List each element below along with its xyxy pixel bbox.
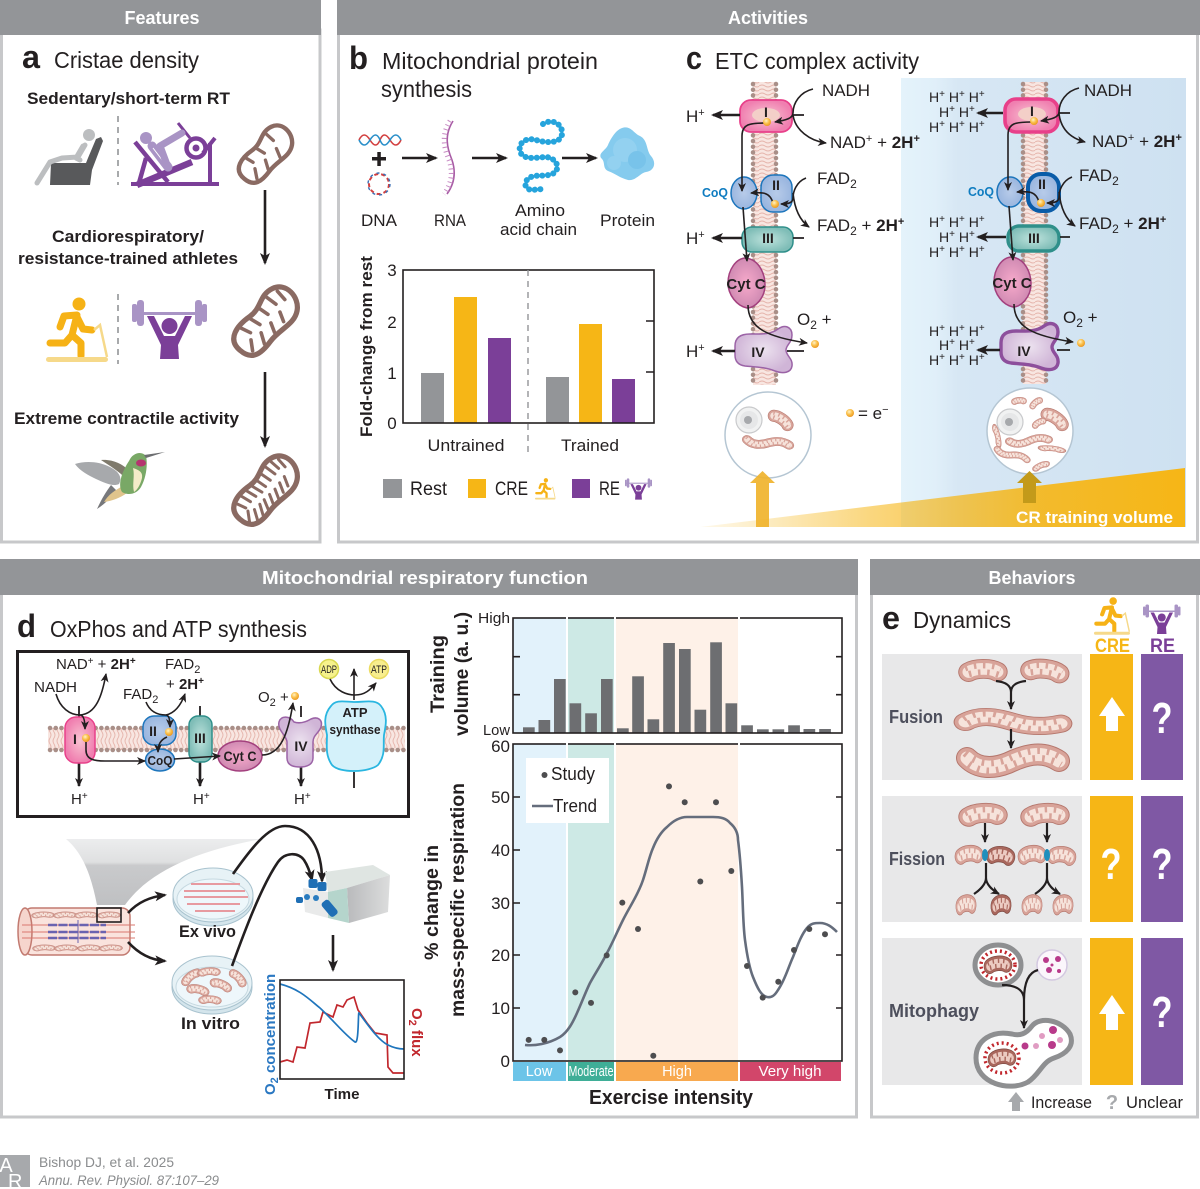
proton pump arrows <box>713 113 1070 351</box>
diagram: oxidative phosphorylation: + <box>88 656 94 667</box>
panel label a: a <box>22 39 40 75</box>
icon: RNA strand <box>444 121 454 194</box>
trained ETC labels: + <box>979 244 985 255</box>
untrained ETC labels: + <box>913 133 920 145</box>
diagram: oxidative phosphorylation: FAD <box>123 686 152 703</box>
panel label c: c <box>686 40 702 76</box>
trained ETC labels: 2H <box>1138 214 1160 233</box>
axis label: percent change in mass-specific respiration: % change in <box>422 845 443 960</box>
key: Increase and Unclear: Increase <box>1031 1093 1092 1112</box>
heading: OxPhos and ATP synthesis: OxPhos and ATP synthesis <box>50 616 307 642</box>
heading: Mitochondrial protein synthesis: synthesis <box>381 76 472 102</box>
chart: percent change in mass-specific respiration: 10 <box>491 999 510 1018</box>
label: Cardiorespiratory/resistance-trained athletes: Cardiorespiratory/ <box>52 227 204 246</box>
trained ETC complexes with thick outlines: Cyt C <box>992 275 1032 292</box>
untrained ETC labels: H <box>686 229 698 248</box>
diagram: oxidative phosphorylation <box>18 652 408 816</box>
diagram: oxidative phosphorylation: 2 <box>152 694 158 706</box>
label: Sedentary/short-term RT: Sedentary/short-term RT <box>27 89 231 108</box>
muscle cell: many mitochondria <box>987 388 1073 474</box>
trained ETC labels: H <box>939 229 949 245</box>
key: Increase and Unclear: ? <box>1106 1092 1118 1114</box>
icon: DNA helix and plasmid <box>359 135 401 195</box>
heading bar: Behaviors: Behaviors <box>988 568 1076 588</box>
heading: Cristae density: Cristae density <box>54 47 199 73</box>
trained ETC labels: H <box>955 229 969 245</box>
chart: oxygen trace: 2 <box>269 1077 281 1083</box>
trained ETC labels <box>929 81 1182 368</box>
diagram: oxidative phosphorylation: FAD <box>165 656 194 673</box>
untrained ETC labels: 2 <box>850 177 857 191</box>
trained ETC labels: + <box>939 214 945 225</box>
chart: oxygen trace: 2 <box>406 1020 418 1026</box>
diagram: oxidative phosphorylation: + <box>130 656 136 667</box>
untrained ETC complexes: II <box>772 177 780 193</box>
column head: CRE: CRE <box>1095 636 1130 657</box>
arrow <box>264 372 266 446</box>
label: Ex vivo: Ex vivo <box>179 922 236 941</box>
heading bar: Activities: Activities <box>728 8 808 28</box>
trained ETC labels: H <box>945 214 959 230</box>
diagram: oxidative phosphorylation: H <box>71 791 82 808</box>
dish: in vitro <box>172 956 252 1014</box>
trained ETC labels: + <box>1134 132 1154 151</box>
trained ETC labels: + <box>939 119 945 130</box>
trained ETC labels: + <box>979 89 985 100</box>
protein synthesis labels <box>361 201 655 239</box>
bar chart: fold-change from rest: 0 <box>387 414 397 433</box>
icon: respirometer <box>296 865 390 923</box>
RE column: mitophagy: ? <box>1152 988 1172 1037</box>
trained ETC labels: 2 <box>1112 222 1119 236</box>
chart: training volume bars: High <box>478 610 510 627</box>
trained ETC labels: 2H <box>1154 132 1175 151</box>
study points <box>526 783 828 1059</box>
bar chart: fold-change from rest: Untrained <box>428 436 504 455</box>
protein synthesis labels: Amino <box>515 201 565 220</box>
diagram: oxidative phosphorylation: 2H <box>111 656 130 673</box>
key: Increase and Unclear <box>1008 1092 1183 1114</box>
key: Increase and Unclear: Unclear <box>1126 1093 1183 1112</box>
trained ETC complexes with thick outlines: IV <box>1017 343 1031 359</box>
trained ETC labels: + <box>1083 308 1098 327</box>
heading: ETC complex activity: ETC complex activity <box>715 48 919 74</box>
diagram: oxidative phosphorylation: + <box>198 676 204 687</box>
untrained ETC complexes: III <box>762 230 774 246</box>
panel: Mitochondrial respiratory function <box>0 559 858 1117</box>
trained ETC labels: + <box>949 337 955 348</box>
diagram: oxidative phosphorylation: O <box>258 689 270 706</box>
citation: Bishop DJ, et al. 2025 <box>39 1154 174 1170</box>
trained ETC labels: FAD <box>1079 166 1112 185</box>
untrained ETC labels: O <box>797 310 810 329</box>
diagram: oxidative phosphorylation: H <box>193 791 204 808</box>
RE column: mitophagy <box>1141 938 1183 1085</box>
heading bar: Activities <box>337 0 1200 35</box>
trained ETC labels: H <box>939 104 949 120</box>
row: fission <box>882 796 1082 922</box>
diagram: oxidative phosphorylation: + <box>204 791 210 802</box>
chart: percent change in mass-specific respiration: 0 <box>501 1052 510 1071</box>
untrained ETC labels: + <box>872 133 892 152</box>
trained ETC labels: + <box>959 214 965 225</box>
diagram: oxidative phosphorylation: H <box>294 791 305 808</box>
trained ETC labels: + <box>959 323 965 334</box>
trained ETC labels: + <box>959 119 965 130</box>
arrow to ex vivo <box>128 895 165 913</box>
trained ETC labels: H <box>965 352 979 368</box>
chart: oxygen trace: O <box>262 1083 279 1095</box>
trained ETC labels: H <box>965 214 979 230</box>
arrow to in vitro <box>128 942 165 961</box>
dish: ex vivo <box>173 868 253 926</box>
trained ETC labels: + <box>969 229 975 240</box>
arrow: in vitro to respirometer <box>232 854 312 966</box>
intensity bands: High <box>662 1064 692 1080</box>
chart: training volume bars: volume (a. u.) <box>452 612 473 736</box>
trained ETC labels: H <box>929 214 939 230</box>
icon: muscle fibre <box>18 908 135 955</box>
trained ETC labels: + <box>979 352 985 363</box>
row: fusion: Fusion <box>889 707 943 727</box>
untrained ETC labels: + <box>898 216 904 228</box>
label: In vitro: In vitro <box>181 1014 240 1033</box>
untrained ETC labels: 2H <box>876 216 898 235</box>
label: Cardiorespiratory/resistance-trained athletes <box>18 227 238 268</box>
electrons <box>763 117 1085 417</box>
arrows: NAD+ release <box>793 114 1085 143</box>
trained ETC labels: + <box>1128 132 1134 144</box>
intensity bands <box>513 1062 841 1081</box>
axis label: Exercise intensity: Exercise intensity <box>589 1087 754 1109</box>
untrained ETC labels: 2 <box>850 224 857 238</box>
chart: oxygen trace <box>262 974 425 1103</box>
trained ETC labels: H <box>929 244 939 260</box>
arrow amino acid chain to protein <box>562 157 596 159</box>
diagram: oxidative phosphorylation: ADP <box>321 664 337 676</box>
chart legend: Study <box>551 764 595 784</box>
trained ETC labels: + <box>959 352 965 363</box>
chart: percent change in mass-specific respiration: 50 <box>491 788 510 807</box>
trained ETC labels: H <box>945 323 959 339</box>
muscle cell: few mitochondria <box>725 392 811 478</box>
trained ETC labels: + <box>969 337 975 348</box>
CRE column: fission <box>1090 796 1133 922</box>
heading bar: Behaviors <box>870 559 1200 595</box>
bar chart: fold-change from rest: 3 <box>387 261 397 280</box>
chart: percent change in mass-specific respiration: 60 <box>491 737 510 756</box>
trained ETC labels: H <box>965 89 979 105</box>
panel label b: b <box>349 40 368 76</box>
diagram: oxidative phosphorylation: ATP <box>371 664 387 676</box>
trained ETC labels: 2 <box>1076 316 1083 330</box>
column head: RE <box>1143 604 1180 657</box>
diagram: oxidative phosphorylation: + 2H <box>166 676 198 693</box>
diagram: oxidative phosphorylation: I <box>73 731 77 747</box>
trained ETC labels: + <box>949 229 955 240</box>
logo: Annual Reviews <box>0 1155 30 1189</box>
protein synthesis labels: RNA <box>434 211 467 230</box>
icon: leg press <box>131 123 219 186</box>
untrained ETC labels: H <box>686 107 698 126</box>
legend: Rest, CRE, RE: RE <box>599 479 620 500</box>
trained ETC labels: H <box>945 89 959 105</box>
RE column: fusion: ? <box>1152 694 1172 743</box>
trained ETC labels: + <box>979 119 985 130</box>
heading bar: Features: Features <box>124 8 200 28</box>
panel: Features <box>0 0 321 542</box>
untrained ETC labels: = e <box>858 404 882 423</box>
chart: oxygen trace: O <box>408 1008 425 1020</box>
trained ETC complexes with thick outlines: I <box>1030 103 1034 119</box>
CRE column: fusion <box>1090 654 1133 780</box>
untrained ETC labels: + <box>698 342 705 354</box>
trend line <box>525 817 837 1045</box>
icon: protein <box>600 127 654 180</box>
icon: runner on treadmill <box>46 298 108 362</box>
RE column: fission <box>1141 796 1183 922</box>
trained ETC labels: + <box>979 214 985 225</box>
bar chart: fold-change from rest: 2 <box>387 313 397 332</box>
chart: oxygen trace: flux <box>408 1026 425 1057</box>
chart: training volume bars: Training <box>428 635 449 713</box>
untrained ETC labels: − <box>882 404 889 416</box>
trained ETC labels: H <box>929 352 939 368</box>
trained ETC labels: 2 <box>1112 174 1119 188</box>
trained ETC labels: + <box>979 323 985 334</box>
intensity bands: Moderate <box>568 1064 614 1080</box>
icon: sparse cristae mitochondrion <box>228 120 302 188</box>
row: mitophagy <box>882 938 1082 1086</box>
untrained ETC labels: FAD <box>817 169 850 188</box>
trained ETC labels: + <box>949 104 955 115</box>
column head: RE: RE <box>1150 636 1175 657</box>
zoom funnel from muscle to mitochondria <box>66 839 262 905</box>
trained ETC labels: H <box>945 352 959 368</box>
bar chart: fold-change from rest: Trained <box>561 436 619 455</box>
CRE column: mitophagy <box>1090 938 1133 1085</box>
diagram: oxidative phosphorylation: NAD <box>56 656 88 673</box>
untrained ETC complexes: CoQ <box>702 185 728 200</box>
trained ETC labels: H <box>939 337 949 353</box>
CR training volume wedge: CR training volume <box>1016 508 1173 527</box>
arrow RNA to amino acid chain <box>472 157 506 159</box>
divider line <box>117 116 119 185</box>
diagram: oxidative phosphorylation: + <box>94 656 111 673</box>
heading: Dynamics: Dynamics <box>913 607 1011 633</box>
trained ETC labels: + <box>939 323 945 334</box>
heading: Mitochondrial protein synthesis <box>381 48 598 102</box>
untrained ETC labels: 2H <box>892 133 913 152</box>
diagram: oxidative phosphorylation: Cyt C <box>224 748 256 764</box>
chart legend: Trend <box>553 796 597 816</box>
panel label e: e <box>882 600 900 636</box>
untrained ETC labels: NADH <box>822 81 870 100</box>
legend: Rest, CRE, RE: CRE <box>495 479 528 500</box>
RE column: fusion <box>1141 654 1183 780</box>
diagram: oxidative phosphorylation: NADH <box>34 679 77 696</box>
trained ETC labels: O <box>1063 308 1076 327</box>
untrained ETC complexes: I <box>764 104 768 120</box>
icon: weightlifter <box>132 300 207 359</box>
column head: CRE <box>1094 597 1130 657</box>
diagram: oxidative phosphorylation: III <box>194 730 206 746</box>
arrow: respirometer to trace <box>332 935 334 970</box>
axis label: percent change in mass-specific respiration: mass-specific respiration <box>448 783 469 1017</box>
bar chart: fold-change from rest: 1 <box>387 364 397 383</box>
diagram: oxidative phosphorylation: + <box>305 791 311 802</box>
label: Cardiorespiratory/resistance-trained athletes: resistance-trained athletes <box>18 249 238 268</box>
row: fusion <box>882 654 1082 780</box>
diagram: oxidative phosphorylation: II <box>149 723 157 739</box>
diagram: oxidative phosphorylation: 2 <box>194 664 200 676</box>
bar chart: fold-change from rest: Fold-change from rest <box>357 256 376 437</box>
trained ETC labels: + <box>959 244 965 255</box>
intensity bands: Low <box>526 1064 553 1080</box>
label: Extreme contractile activity: Extreme contractile activity <box>14 409 240 428</box>
untrained ETC labels: + <box>857 216 876 235</box>
row: mitophagy: Mitophagy <box>889 1001 979 1021</box>
protein synthesis labels: acid chain <box>500 220 577 239</box>
untrained ETC labels: FAD <box>817 216 850 235</box>
intensity bands: Very high <box>758 1064 822 1080</box>
chart: oxygen trace: concentration <box>262 974 279 1077</box>
chart: training volume bars <box>428 610 842 739</box>
trained ETC complexes with thick outlines: III <box>1028 230 1040 246</box>
chart: training volume bars: Low <box>483 722 510 739</box>
legend: Rest, CRE, RE: Rest <box>410 479 448 500</box>
citation <box>38 1154 219 1188</box>
arrow: high training volume <box>1017 471 1042 503</box>
diagram: oxidative phosphorylation: + <box>82 791 88 802</box>
panel label d: d <box>17 608 36 644</box>
untrained ETC labels: + <box>866 133 872 145</box>
trained ETC labels: H <box>965 244 979 260</box>
protein synthesis labels: DNA <box>361 211 398 230</box>
trained ETC labels: + <box>939 89 945 100</box>
untrained ETC labels: + <box>698 107 705 119</box>
arrow <box>264 190 266 263</box>
trained ETC labels: NAD <box>1092 132 1128 151</box>
trained ETC labels: + <box>939 244 945 255</box>
chart: oxygen trace: Time <box>324 1086 360 1103</box>
diagram: oxidative phosphorylation: synthase <box>330 722 380 737</box>
untrained ETC labels: + <box>817 310 832 329</box>
trained ETC labels: H <box>965 119 979 135</box>
icon: person in armchair <box>37 129 103 185</box>
electron transfer arrows: trained <box>1008 88 1079 342</box>
RE column: fission: ? <box>1152 840 1172 889</box>
legend: Rest, CRE, RE <box>383 478 652 500</box>
heading bar: Features <box>0 0 321 35</box>
arrow DNA to RNA <box>402 157 436 159</box>
trained condition background <box>901 78 1186 527</box>
panel: Behaviors <box>870 559 1200 1117</box>
trained ETC labels: + <box>969 104 975 115</box>
chart legend <box>526 758 609 823</box>
trained ETC labels: NADH <box>1084 81 1132 100</box>
trained ETC labels: H <box>929 323 939 339</box>
chart: percent change in mass-specific respiration <box>422 737 842 1109</box>
diagram: oxidative phosphorylation: CoQ <box>148 753 172 768</box>
trained ETC labels: FAD <box>1079 214 1112 233</box>
untrained ETC labels: H <box>686 342 698 361</box>
icon: dense cristae mitochondrion <box>221 450 309 531</box>
diagram: oxidative phosphorylation: IV <box>294 738 308 754</box>
untrained ETC labels: 2 <box>810 318 817 332</box>
heading bar: Mitochondrial respiratory function <box>0 559 858 595</box>
panel: Activities <box>337 0 1200 542</box>
trained ETC labels: + <box>939 352 945 363</box>
CR training volume wedge <box>700 468 1185 527</box>
heading: Mitochondrial protein synthesis: Mitochondrial protein <box>382 48 598 74</box>
trained ETC complexes with thick outlines: II <box>1038 176 1046 192</box>
chart: percent change in mass-specific respiration: 20 <box>491 946 510 965</box>
trained ETC labels: + <box>1160 214 1166 226</box>
trained ETC labels: H <box>965 323 979 339</box>
trained ETC labels: + <box>959 89 965 100</box>
divider line <box>117 294 119 364</box>
electron transfer arrows: untrained <box>742 89 813 343</box>
trained ETC labels: H <box>929 89 939 105</box>
citation: Annu. Rev. Physiol. 87:107–29 <box>38 1172 219 1188</box>
untrained ETC complexes: IV <box>751 344 765 360</box>
untrained ETC complexes <box>702 100 793 373</box>
axis label: percent change in mass-specific respiration <box>422 783 469 1017</box>
trained ETC labels: + <box>1175 132 1182 144</box>
membrane: untrained <box>753 82 776 385</box>
row: fission: Fission <box>889 849 945 869</box>
CRE column: fission: ? <box>1100 840 1122 889</box>
trained ETC labels: H <box>955 337 969 353</box>
chart: percent change in mass-specific respiration: 40 <box>491 841 510 860</box>
trained ETC labels: H <box>945 119 959 135</box>
trained ETC labels: H <box>945 244 959 260</box>
bar chart: fold-change from rest <box>357 256 654 455</box>
untrained ETC labels: NAD <box>830 133 866 152</box>
trained ETC complexes with thick outlines <box>968 99 1059 370</box>
untrained ETC labels <box>686 81 920 423</box>
untrained ETC complexes: Cyt C <box>726 276 766 293</box>
trained ETC complexes with thick outlines: CoQ <box>968 184 994 199</box>
icon: moderate cristae mitochondrion <box>221 281 309 362</box>
diagram: oxidative phosphorylation: ATP <box>342 705 368 720</box>
arrow: low training volume <box>750 471 775 527</box>
heading bar: Mitochondrial respiratory function: Mitochondrial respiratory function <box>262 568 588 588</box>
chart: percent change in mass-specific respiration: 30 <box>491 894 510 913</box>
membrane: trained <box>1023 82 1046 384</box>
icon: hummingbird <box>75 452 165 509</box>
icon: amino acid chain <box>520 122 562 190</box>
trained ETC labels: + <box>1119 214 1138 233</box>
protein synthesis labels: Protein <box>600 211 655 230</box>
diagram: oxidative phosphorylation: 2 <box>270 697 276 709</box>
trained ETC labels: H <box>929 119 939 135</box>
diagram: oxidative phosphorylation: + <box>276 689 289 706</box>
untrained ETC labels: + <box>698 229 705 241</box>
trained ETC labels: H <box>955 104 969 120</box>
arrow: ex vivo to respirometer <box>233 826 322 881</box>
